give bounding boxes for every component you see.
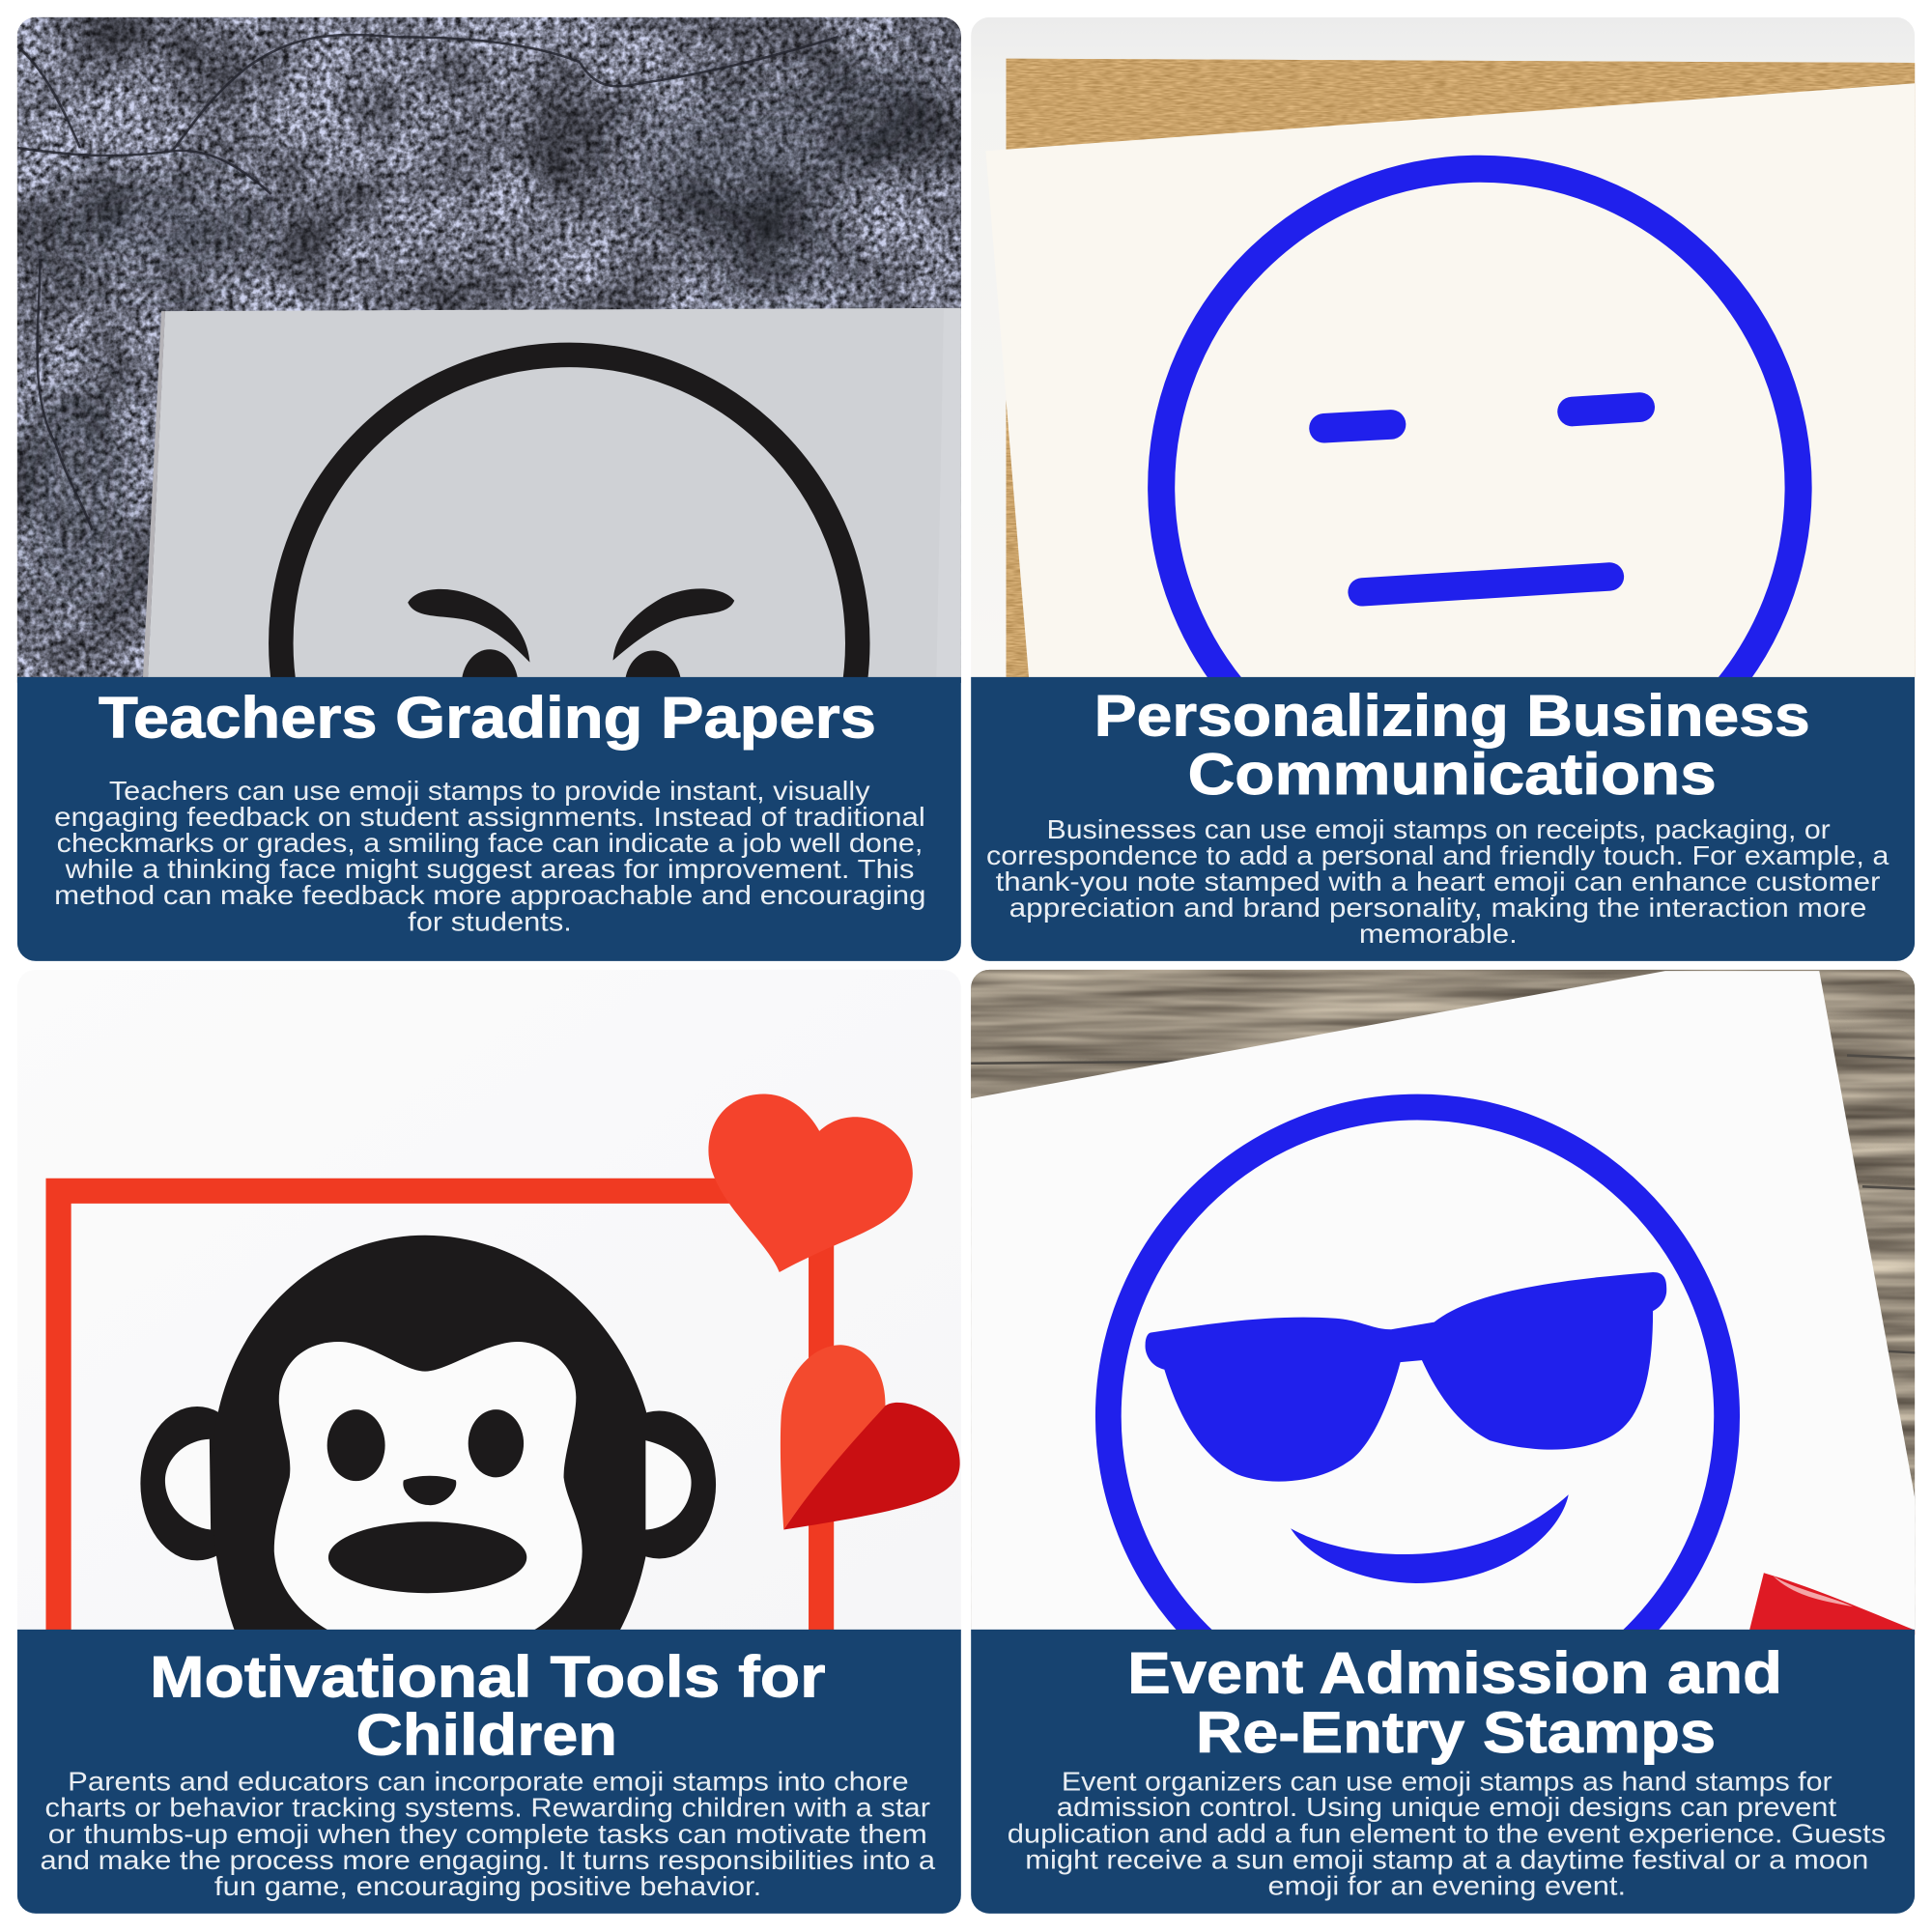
icon: red stamp handle — [1748, 1573, 1918, 1634]
photo: wood table, paper and sunglasses emoji stamp — [971, 970, 1915, 1635]
text block — [54, 776, 926, 936]
caption band — [971, 1630, 1915, 1915]
heading: Event Admission and — [1127, 1641, 1782, 1706]
icon: folded paper heart — [781, 1345, 960, 1530]
text block: thank-you note stamped with a heart emoji can enhance customer — [996, 867, 1880, 896]
heading — [154, 1654, 825, 1756]
text block: might receive a sun emoji stamp at a daytime festival or a moon — [1025, 1844, 1868, 1874]
icon: neutral emoji face — [1148, 155, 1812, 677]
panel: Teachers Grading Papers — [17, 17, 961, 962]
photo: red frame, paper hearts and monkey emoji stamp — [46, 1094, 960, 1630]
text block: while a thinking face might suggest areas for improvement. This — [64, 854, 914, 884]
text block — [986, 814, 1889, 949]
heading: Re-Entry Stamps — [1196, 1700, 1716, 1765]
icon: angry emoji face — [269, 342, 869, 677]
heading: Motivational Tools for — [150, 1644, 826, 1709]
text block: admission control. Using unique emoji designs can prevent — [1057, 1792, 1837, 1822]
text block: or thumbs-up emoji when they complete tasks can motivate them — [48, 1819, 927, 1849]
caption band — [17, 677, 961, 962]
text block: for students. — [408, 906, 572, 936]
heading: Communications — [1188, 742, 1717, 807]
icon: top paper heart — [708, 1094, 913, 1272]
caption band — [17, 1630, 961, 1915]
red paper frame — [59, 1191, 821, 1644]
text block: Businesses can use emoji stamps on receipts, packaging, or — [1047, 814, 1831, 844]
text block: Parents and educators can incorporate emoji stamps into chore — [68, 1767, 909, 1797]
text block: checkmarks or grades, a smiling face can indicate a job well done, — [57, 828, 923, 858]
heading: Children — [356, 1702, 617, 1767]
photo: concrete surface with angry emoji stamp — [17, 17, 961, 683]
panel: Event Admission and Re-Entry Stamps — [966, 970, 1918, 1915]
text block: emoji for an evening event. — [1267, 1871, 1626, 1901]
text block — [40, 1767, 936, 1901]
heading — [1097, 693, 1808, 795]
text block: memorable. — [1359, 919, 1518, 949]
text block: charts or behavior tracking systems. Rewarding children with a star — [45, 1793, 930, 1823]
icon: sunglasses emoji face — [1108, 1107, 1727, 1725]
heading: Teachers Grading Papers — [99, 685, 876, 750]
text block: and make the process more engaging. It turns responsibilities into a — [40, 1845, 936, 1875]
text block: duplication and add a fun element to the event experience. Guests — [1008, 1819, 1886, 1849]
text block: correspondence to add a personal and friendly touch. For example, a — [986, 840, 1889, 870]
text block: fun game, encouraging positive behavior. — [214, 1871, 761, 1901]
heading: Personalizing Business — [1094, 683, 1810, 748]
heading — [1127, 1641, 1782, 1765]
photo: paper on kraft envelope with neutral emoji stamp — [971, 17, 1915, 678]
text block: Teachers can use emoji stamps to provide instant, visually — [109, 776, 870, 806]
text block: engaging feedback on student assignments. Instead of traditional — [54, 802, 925, 832]
text block — [1008, 1766, 1886, 1901]
text block: Event organizers can use emoji stamps as hand stamps for — [1062, 1766, 1833, 1796]
icon: monkey emoji face — [140, 1236, 716, 1637]
text block: method can make feedback more approachable and encouraging — [54, 880, 926, 910]
caption band — [971, 677, 1915, 962]
panel: Personalizing Business Communications — [966, 17, 1918, 962]
panel: Motivational Tools for Children — [17, 1094, 961, 1914]
text block: appreciation and brand personality, making the interaction more — [1009, 893, 1866, 923]
